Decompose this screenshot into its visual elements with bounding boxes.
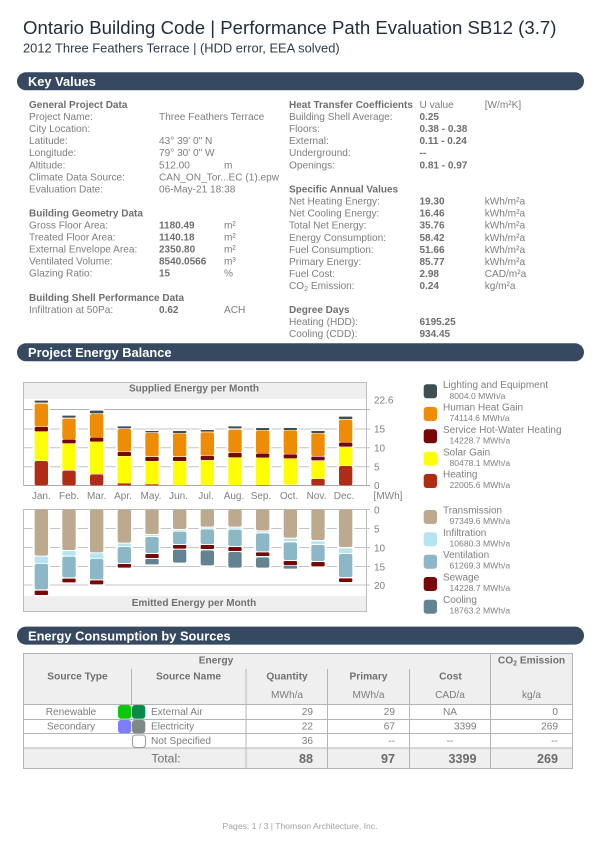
month labels: Sep.: [251, 491, 271, 502]
table row: electricity: Secondary: [47, 722, 96, 733]
panel: heat transfer coefficients: Openings:: [289, 160, 335, 171]
month labels: Jul.: [198, 491, 214, 502]
panel: degree days: 934.45: [420, 329, 451, 340]
title: Ontario Building Code | Performance Path Evaluation SB12 (3.7): [23, 17, 556, 38]
bars: supplied energy: [33, 399, 354, 485]
table: energy consumption by sources: [24, 654, 572, 768]
panel: building geometry data: 1180.49: [159, 220, 195, 232]
table row: external air: NA: [443, 707, 457, 718]
panel: general project data: CAN_ON_Tor...EC (1).epw: [159, 172, 280, 183]
legend: supplied energy: 8004.0 MWh/a: [450, 391, 506, 401]
table row: not specified: --: [388, 736, 395, 747]
table row: external air: 29: [302, 707, 313, 718]
legend: supplied energy: 80478.1 MWh/a: [450, 458, 510, 468]
table header: Primary: [350, 671, 388, 682]
panel: building geometry data: Glazing Ratio:: [29, 269, 92, 280]
panel: heat transfer coefficients: Underground:: [289, 148, 351, 159]
table header: Energy: [199, 656, 234, 666]
panel: specific annual values: kWh/m²a: [485, 257, 525, 268]
panel: specific annual values: Fuel Cost:: [289, 269, 335, 280]
panel: degree days: 6195.25: [420, 317, 456, 328]
legend: supplied energy: 22005.6 MWh/a: [450, 480, 510, 490]
panel: specific annual values: CAD/m²a: [485, 269, 527, 280]
panel: building geometry data: [29, 208, 236, 280]
panel: heat transfer coefficients: 0.38 - 0.38: [420, 124, 468, 135]
section heading: key values: [17, 72, 584, 90]
panel: building shell performance data: [29, 293, 245, 316]
emitted axis labels: 5: [374, 524, 380, 536]
table row: electricity: 3399: [454, 722, 477, 733]
table row: external air: External Air: [151, 707, 203, 718]
panel: general project data: Latitude:: [29, 136, 68, 147]
legend: emitted energy: Transmission: [443, 506, 502, 516]
supplied axis labels: [374, 396, 394, 492]
panel: heat transfer coefficients: 0.25: [420, 112, 439, 123]
legend: emitted energy: [424, 506, 510, 616]
month labels: Nov.: [307, 491, 326, 502]
panel: specific annual values: kWh/m²a: [485, 196, 525, 208]
panel: general project data: Project Name:: [29, 112, 93, 123]
panel: specific annual values: 0.24: [420, 281, 439, 292]
month labels: Apr.: [114, 491, 132, 502]
table row: not specified: --: [447, 736, 453, 747]
panel: building shell performance data: Infiltration at 50Pa:: [29, 305, 113, 316]
panel: general project data: Altitude:: [29, 160, 65, 171]
panel: building shell performance data: 0.62: [159, 305, 179, 316]
month labels: Dec.: [334, 491, 354, 502]
panel: specific annual values: Emission:: [308, 281, 355, 292]
panel: specific annual values: kWh/m²a: [485, 245, 525, 256]
panel: specific annual values: 19.30: [420, 196, 445, 208]
table header: Emission: [517, 656, 565, 666]
chart: supplied energy per month: [24, 382, 394, 492]
bars: emitted energy: [33, 509, 354, 597]
panel: general project data: 06-May-21 18:38: [159, 184, 236, 196]
month labels: Aug.: [224, 491, 244, 502]
panel: specific annual values: 85.77: [420, 257, 445, 268]
table row: electricity: 67: [384, 722, 395, 733]
legend: supplied energy: Heating: [443, 470, 477, 480]
chart: supplied energy per month: Supplied Energy per Month: [129, 384, 259, 394]
month labels: May.: [141, 491, 161, 502]
panel: specific annual values: 2: [304, 286, 308, 293]
panel: general project data: m: [224, 160, 232, 171]
legend: emitted energy: 61269.3 MWh/a: [450, 560, 510, 570]
panel: specific annual values: Energy Consumption:: [289, 233, 386, 244]
panel: specific annual values: Net Cooling Energy:: [289, 209, 379, 220]
month labels: Oct.: [280, 491, 298, 502]
panel: heat transfer coefficients: Heat Transfer Coefficients: [289, 100, 413, 111]
supplied axis labels: 10: [374, 444, 386, 454]
section heading: key values: Key Values: [28, 74, 96, 89]
panel: building geometry data: External Envelope Area:: [29, 245, 137, 256]
panel: general project data: City Location:: [29, 124, 90, 135]
emitted axis labels: [374, 506, 386, 592]
panel: building geometry data: m²: [224, 245, 236, 256]
panel: building geometry data: 2350.80: [159, 245, 196, 256]
panel: specific annual values: kg/m²a: [485, 281, 516, 292]
table row: total: Total:: [151, 752, 181, 766]
table row: not specified: [132, 735, 558, 748]
panel: general project data: Three Feathers Terrace: [159, 112, 265, 123]
panel: building shell performance data: ACH: [224, 305, 245, 316]
panel: heat transfer coefficients: 0.81 - 0.97: [420, 160, 468, 171]
section heading: energy consumption by sources: Energy Consumption by Sources: [28, 628, 231, 643]
legend: supplied energy: [424, 380, 562, 490]
legend: supplied energy: Service Hot-Water Heating: [443, 425, 562, 436]
legend: emitted energy: 18763.2 MWh/a: [450, 606, 510, 616]
table header: Source Type: [47, 671, 108, 682]
section heading: project energy balance: Project Energy Balance: [28, 345, 171, 360]
table header: Cost: [439, 671, 462, 682]
table row: total: 88: [299, 752, 313, 766]
table header: Source Name: [156, 671, 221, 682]
panel: specific annual values: 2.98: [420, 269, 439, 280]
table row: external air: Renewable: [46, 707, 97, 718]
section heading: energy consumption by sources: [17, 627, 584, 645]
emitted axis labels: 20: [374, 581, 386, 592]
legend: emitted energy: Infiltration: [443, 528, 486, 539]
legend: supplied energy: Solar Gain: [443, 447, 490, 458]
legend: emitted energy: Sewage: [443, 572, 480, 584]
panel: building geometry data: 15: [159, 269, 171, 280]
table row: electricity: 269: [541, 722, 558, 733]
panel: specific annual values: [289, 184, 527, 293]
emitted axis labels: 0: [374, 506, 380, 516]
supplied axis labels: 0: [374, 481, 380, 492]
panel: heat transfer coefficients: 0.11 - 0.24: [420, 136, 467, 147]
panel: specific annual values: Fuel Consumption:: [289, 245, 374, 256]
subtitle: 2012 Three Feathers Terrace | (HDD error, EEA solved): [23, 40, 340, 56]
panel: heat transfer coefficients: External:: [289, 136, 329, 147]
supplied axis labels: 22.6: [374, 396, 394, 406]
panel: specific annual values: CO: [289, 281, 304, 292]
panel: general project data: General Project Data: [29, 100, 128, 111]
panel: heat transfer coefficients: --: [420, 148, 426, 159]
panel: general project data: 43° 39' 0" N: [159, 136, 212, 147]
panel: degree days: Heating (HDD):: [289, 317, 358, 328]
table row: external air: [46, 705, 558, 719]
panel: building geometry data: Treated Floor Area:: [29, 232, 116, 244]
supplied axis labels: 5: [374, 462, 380, 474]
table header: Quantity: [266, 671, 308, 682]
panel: building shell performance data: Building Shell Performance Data: [29, 293, 184, 304]
panel: specific annual values: Specific Annual Values: [289, 184, 399, 196]
panel: heat transfer coefficients: [W/m²K]: [485, 100, 521, 111]
legend: supplied energy: 14228.7 MWh/a: [450, 436, 510, 446]
panel: building geometry data: %: [224, 269, 233, 280]
panel: general project data: [29, 100, 280, 196]
panel: building geometry data: Ventilated Volume:: [29, 257, 113, 268]
panel: building geometry data: m²: [224, 232, 236, 244]
table header: 2: [513, 660, 517, 668]
panel: specific annual values: Total Net Energy:: [289, 221, 366, 232]
panel: building geometry data: m²: [224, 220, 236, 232]
table row: total: 269: [537, 752, 558, 766]
panel: general project data: Climate Data Source:: [29, 172, 125, 183]
panel: general project data: Longitude:: [29, 148, 76, 159]
table header: MWh/a: [353, 690, 385, 701]
panel: building geometry data: Building Geometry Data: [29, 208, 143, 220]
table header: kg/a: [522, 690, 541, 701]
panel: specific annual values: kWh/m²a: [485, 209, 525, 220]
legend: emitted energy: Cooling: [443, 595, 477, 606]
month labels: Feb.: [59, 491, 79, 502]
panel: heat transfer coefficients: Building Shell Average:: [289, 112, 393, 123]
chart: emitted energy per month: Emitted Energy per Month: [132, 598, 256, 609]
table row: electricity: 22: [302, 722, 313, 733]
panel: general project data: 79° 30' 0" W: [159, 148, 215, 159]
table row: not specified: Not Specified: [151, 736, 211, 747]
table row: electricity: [47, 720, 558, 733]
emitted axis labels: 10: [374, 543, 386, 554]
panel: specific annual values: kWh/m²a: [485, 233, 525, 244]
month labels: Jan.: [32, 491, 51, 502]
table row: not specified: 36: [302, 736, 313, 747]
table row: total: 97: [381, 752, 395, 766]
panel: specific annual values: 16.46: [420, 209, 445, 220]
emitted axis labels: 15: [374, 562, 386, 573]
legend: supplied energy: Lighting and Equipment: [443, 380, 548, 391]
panel: building geometry data: 1140.18: [159, 232, 195, 244]
panel: degree days: [289, 305, 456, 340]
supplied axis labels: 15: [374, 425, 386, 436]
chart: emitted energy per month: [24, 506, 386, 612]
panel: degree days: Degree Days: [289, 305, 350, 316]
panel: general project data: 512.00: [159, 160, 190, 171]
panel: heat transfer coefficients: [289, 100, 521, 171]
legend: supplied energy: Human Heat Gain: [443, 402, 523, 414]
panel: specific annual values: kWh/m²a: [485, 221, 525, 232]
month labels: Jun.: [169, 491, 188, 502]
table header: CO: [498, 656, 513, 666]
panel: specific annual values: Net Heating Energy:: [289, 196, 380, 208]
legend: emitted energy: 97349.6 MWh/a: [450, 516, 510, 526]
month labels: [MWh]: [374, 491, 403, 502]
panel: building geometry data: m³: [224, 257, 236, 268]
panel: heat transfer coefficients: Floors:: [289, 124, 320, 135]
table header: CAD/a: [435, 690, 465, 701]
panel: heat transfer coefficients: U value: [420, 100, 454, 111]
month labels: Mar.: [87, 491, 106, 502]
legend: emitted energy: 10680.3 MWh/a: [450, 538, 510, 548]
panel: building geometry data: Gross Floor Area:: [29, 220, 108, 232]
section heading: project energy balance: [17, 343, 584, 361]
table row: external air: 0: [552, 707, 558, 718]
panel: degree days: Cooling (CDD):: [289, 329, 357, 340]
table row: total: 3399: [448, 752, 476, 766]
table row: not specified: --: [551, 736, 558, 747]
month labels: [32, 491, 403, 502]
legend: emitted energy: 14228.7 MWh/a: [450, 583, 510, 593]
table row: total: [151, 752, 558, 766]
table header: MWh/a: [271, 690, 303, 701]
panel: specific annual values: 35.76: [420, 221, 445, 232]
panel: specific annual values: Primary Energy:: [289, 257, 361, 268]
footer: Pages: 1 / 3 | Thomson Architecture, Inc.: [223, 821, 377, 831]
panel: general project data: Evaluation Date:: [29, 184, 103, 196]
table row: external air: 29: [384, 707, 395, 718]
legend: supplied energy: 74114.6 MWh/a: [450, 413, 510, 423]
panel: specific annual values: 51.66: [420, 245, 445, 256]
legend: emitted energy: Ventilation: [443, 550, 489, 561]
table header: [47, 656, 565, 701]
panel: specific annual values: 58.42: [420, 233, 445, 244]
table row: electricity: Electricity: [151, 722, 195, 733]
panel: building geometry data: 8540.0566: [159, 257, 207, 268]
